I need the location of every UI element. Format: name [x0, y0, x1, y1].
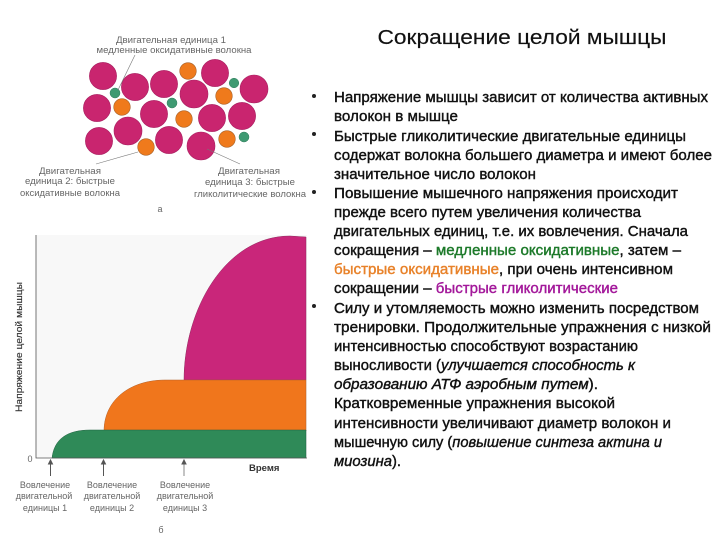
bullet 4: интенсивности увеличивают диаметр волокон и: [334, 416, 671, 432]
recruitment label 3: двигательной: [157, 491, 213, 501]
label: motor unit 1: Двигательная единица 1: [116, 35, 226, 45]
bullet 4: Кратковременные упражнения высокой: [334, 396, 615, 412]
zero label: 0: [27, 454, 33, 464]
label: b: б: [158, 525, 164, 535]
plot background: [36, 235, 307, 458]
recruitment label 3: Вовлечение: [160, 480, 210, 490]
recruitment label 3: единицы 3: [163, 503, 207, 513]
arrows: [48, 460, 186, 476]
label: a: а: [157, 204, 163, 214]
label: motor unit 1: медленные оксидативные волокна: [96, 45, 252, 55]
leader lines: [96, 55, 240, 164]
diagram a: muscle fibre cross-section: [20, 35, 306, 214]
bullet 1: волокон в мышце: [334, 109, 458, 125]
area: unit 2 orange: [104, 380, 306, 431]
y axis label: Напряжение целой мышцы: [14, 282, 25, 412]
bullet 1: Напряжение мышцы зависит от количества активных: [334, 90, 709, 106]
recruitment label 1: двигательной: [16, 491, 72, 501]
label: motor unit 2: оксидативные волокна: [20, 188, 120, 198]
bullet 3: сокращении – быстрые гликолитические: [334, 281, 618, 297]
x axis label: Время: [249, 463, 279, 474]
recruitment label 1: Вовлечение: [20, 480, 70, 490]
recruitment label 2: двигательной: [84, 491, 140, 501]
recruitment label 1: единицы 1: [23, 503, 67, 513]
recruitment label 2: Вовлечение: [87, 480, 137, 490]
fast glycolytic fibres: [110, 78, 249, 142]
bullet 4: Силу и утомляемость можно изменить посредством: [334, 301, 699, 317]
bullet 3: быстрые оксидативные , при очень интенсивном: [334, 262, 673, 278]
bullet 2: [334, 129, 712, 183]
bullet 2: содержат волокна большего диаметра и имеют более: [334, 148, 712, 164]
bullet 3: [334, 186, 689, 297]
bullet markers: [312, 94, 316, 308]
bullet 4: образованию АТФ аэробным путем ).: [334, 377, 598, 393]
axes: [36, 235, 307, 458]
slow oxidative fibres: [83, 59, 268, 160]
bullet 4: мышечную силу (повышение синтеза актина и: [334, 435, 662, 451]
bullet 4: выносливости (улучшается способность к: [334, 358, 636, 374]
label: motor unit 3: гликолитические волокна: [194, 189, 306, 199]
bullet 4: миозина).: [334, 454, 401, 470]
area: unit 3 magenta: [184, 236, 306, 380]
title: Сокращение целой мышцы: [378, 27, 666, 49]
recruitment label 2: единицы 2: [90, 503, 134, 513]
fast oxidative fibres: [114, 63, 235, 155]
bullet 4: [334, 301, 711, 470]
bullet 2: Быстрые гликолитические двигательные единицы: [334, 129, 686, 145]
bullet 3: прежде всего путем увеличения количества: [334, 205, 642, 221]
bullet list: [312, 90, 712, 470]
bullet 2: значительное число волокон: [334, 167, 536, 183]
bullet 1: [334, 90, 709, 125]
chart b: muscle tension over time: [14, 235, 307, 535]
label: motor unit 2: единица 2: быстрые: [25, 176, 115, 186]
bullet 4: тренировки. Продолжительные упражнения с низкой: [334, 320, 711, 336]
bullet 4: интенсивностью способствуют возрастанию: [334, 339, 638, 355]
label: motor unit 2: Двигательная: [39, 166, 101, 176]
label: motor unit 3: единица 3: быстрые: [205, 177, 295, 187]
label: motor unit 3: Двигательная: [218, 166, 280, 176]
bullet 3: Повышение мышечного напряжения происходит: [334, 186, 678, 202]
bullet 3: двигательных единиц, т.е. их вовлечения. Сначала: [334, 224, 689, 240]
area: unit 1 green: [52, 430, 306, 458]
bullet 3: сокращения – медленные оксидативные , затем –: [334, 243, 682, 259]
